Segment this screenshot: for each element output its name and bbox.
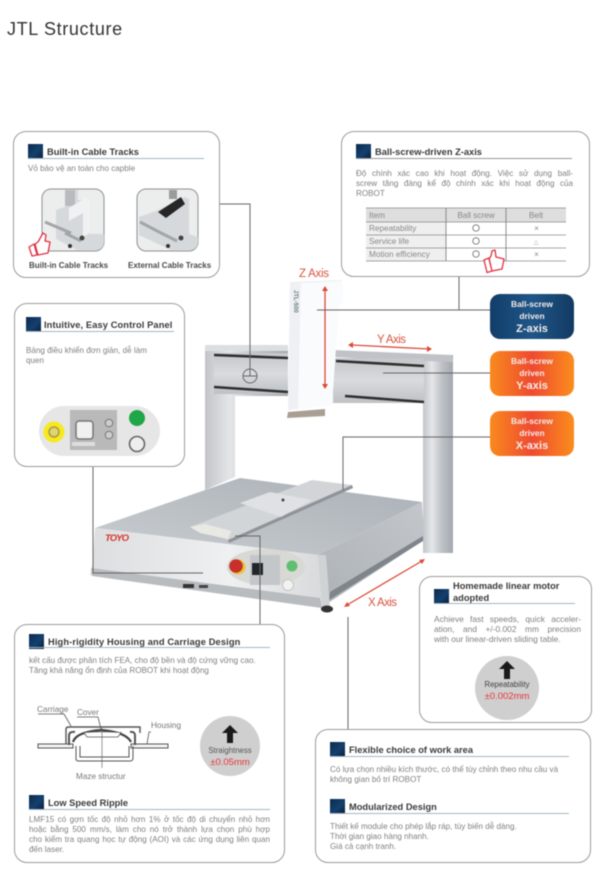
x axis arrow [344, 559, 425, 607]
description: Độ chính xác cao khi hoạt động. Việc sử dụng ball- [356, 169, 573, 178]
housing cross-section diagram: Carriage [37, 705, 69, 714]
description [28, 656, 256, 676]
description: đến laser. [29, 845, 64, 854]
control panel graphic [39, 406, 160, 456]
thumbnail: external [137, 189, 198, 251]
caption: external: External Cable Tracks [128, 261, 211, 270]
description: with our linear-driven sliding table. [434, 634, 561, 644]
housing cross-section diagram [36, 705, 182, 781]
comparison table: △ [534, 240, 539, 246]
z axis carriage: JTL-500 [292, 290, 298, 313]
callout: z-axis [490, 294, 574, 339]
comparison table: Motion efficiency [369, 250, 431, 259]
heading icon [330, 799, 345, 814]
callout: x-axis [490, 411, 574, 456]
heading icon [28, 144, 43, 159]
description [330, 764, 558, 784]
axis label: z: Z Axis [299, 268, 329, 280]
callout: y-axis: driven [519, 368, 545, 378]
description [434, 614, 582, 644]
callout: z-axis: Z-axis [516, 323, 548, 335]
z axis arrow [322, 286, 328, 389]
description: ation, and +/-0.002 mm precision [434, 624, 581, 634]
comparison table: × [534, 250, 539, 259]
icon: thumbs up [484, 250, 504, 272]
caption: built-in: Built-in Cable Tracks [29, 261, 108, 270]
callout: z-axis: driven [519, 310, 545, 320]
description: cho kiểm tra quang học tự động (AOI) và các ứng dụng liên quan [29, 835, 270, 844]
description: không gian bố trí ROBOT [330, 775, 421, 784]
panel: linear motor [419, 576, 592, 723]
stat: repeatability: Repeatability [484, 680, 530, 689]
heading icon [29, 634, 44, 649]
housing cross-section diagram: Housing [151, 721, 181, 730]
heading [452, 581, 560, 604]
callout: x-axis: driven [519, 428, 545, 438]
callout: y-axis [490, 351, 574, 396]
heading icon [29, 795, 44, 810]
axis label: x: X Axis [368, 597, 397, 609]
description [28, 814, 270, 854]
heading icon [434, 589, 449, 604]
panel: ball-screw-driven z-axis [341, 131, 590, 277]
description: Thiết kế module cho phép lắp ráp, tùy biến dễ dàng. [330, 822, 517, 831]
comparison table [366, 207, 566, 274]
panel: built-in cable tracks [13, 131, 220, 278]
leader lines [93, 204, 490, 729]
panel: work area and modular design [315, 729, 591, 863]
left column [205, 345, 288, 490]
description [330, 821, 517, 851]
description: Giá cả cạnh tranh. [330, 842, 396, 851]
description: screw tăng đáng kể độ chính xác khi hoạt động của [356, 179, 573, 188]
comparison table: Repeatability [369, 224, 417, 233]
description: LMF15 có gợn tốc độ nhỏ hơn 1% ở tốc độ di chuyển nhỏ hơn [29, 815, 270, 824]
comparison table: Ball screw [457, 211, 495, 220]
heading: High-rigidity Housing and Carriage Design [48, 637, 240, 647]
description: kết cấu được phân tích FEA, cho độ bền và độ cứng vững cao. [29, 656, 256, 665]
heading icon [26, 317, 41, 332]
stat: straightness: ±0.05mm [210, 757, 250, 768]
machine control panel [183, 549, 305, 590]
comparison table: Service life [369, 237, 409, 246]
title: JTL Structure [7, 19, 123, 39]
right column and beam [332, 350, 453, 553]
housing cross-section diagram: Cover [77, 708, 99, 717]
heading: Intuitive, Easy Control Panel [44, 320, 172, 330]
heading: Built-in Cable Tracks [47, 147, 139, 157]
heading icon [356, 144, 371, 159]
callout: z-axis: Ball-screw [511, 299, 553, 309]
comparison table: Item [369, 211, 385, 220]
logo: TOYO: TOYO [105, 533, 130, 544]
description: Thời gian giao hàng nhanh. [330, 832, 429, 841]
thumbnails [28, 188, 200, 258]
callout: y-axis: Y-axis [516, 380, 548, 392]
panel: axis callouts [489, 293, 575, 457]
stat: straightness: Straightness [208, 746, 252, 755]
stat: straightness [200, 716, 260, 776]
machine base [90, 478, 424, 612]
thumbnail: built-in [42, 189, 104, 251]
heading: adopted [453, 593, 489, 603]
panel: housing and ripple [14, 624, 285, 863]
comparison table: Belt [529, 211, 544, 220]
description: ROBOT [356, 189, 385, 198]
callout: x-axis: Ball-screw [511, 416, 553, 426]
heading: Ball-screw-driven Z-axis [375, 147, 482, 157]
description: Bảng điều khiển đơn giản, dễ làm quen [26, 346, 147, 365]
panel: control panel [14, 303, 185, 467]
housing cross-section diagram: Maze structur [76, 772, 126, 781]
description: Tăng khả năng ổn định của ROBOT khi hoạt động [29, 666, 209, 675]
stat: repeatability [475, 656, 539, 720]
y axis arrow [348, 342, 432, 352]
description: Vỏ bảo vệ an toàn cho capble [28, 164, 135, 173]
callout: x-axis: X-axis [516, 440, 548, 452]
comparison table: × [534, 224, 539, 233]
description: Achieve fast speeds, quick acceler- [434, 614, 581, 624]
description: Có lựa chọn nhiều kích thước, có thể tùy chỉnh theo nhu cầu và [330, 765, 558, 774]
heading: Flexible choice of work area [349, 745, 473, 755]
z axis carriage [287, 280, 343, 418]
stat: repeatability: ±0.002mm [485, 691, 529, 702]
description [356, 169, 574, 198]
icon: thumbs up [29, 233, 50, 256]
heading icon [330, 742, 345, 757]
description: hoặc bằng 500 mm/s, làm cho nó trở thành lựa chọn phù hợp [29, 825, 270, 834]
callout: y-axis: Ball-screw [511, 356, 553, 366]
heading: Modularized Design [349, 802, 437, 812]
axis label: y: Y Axis [377, 334, 406, 346]
heading: Low Speed Ripple [48, 798, 128, 808]
heading: Homemade linear motor [453, 581, 559, 591]
